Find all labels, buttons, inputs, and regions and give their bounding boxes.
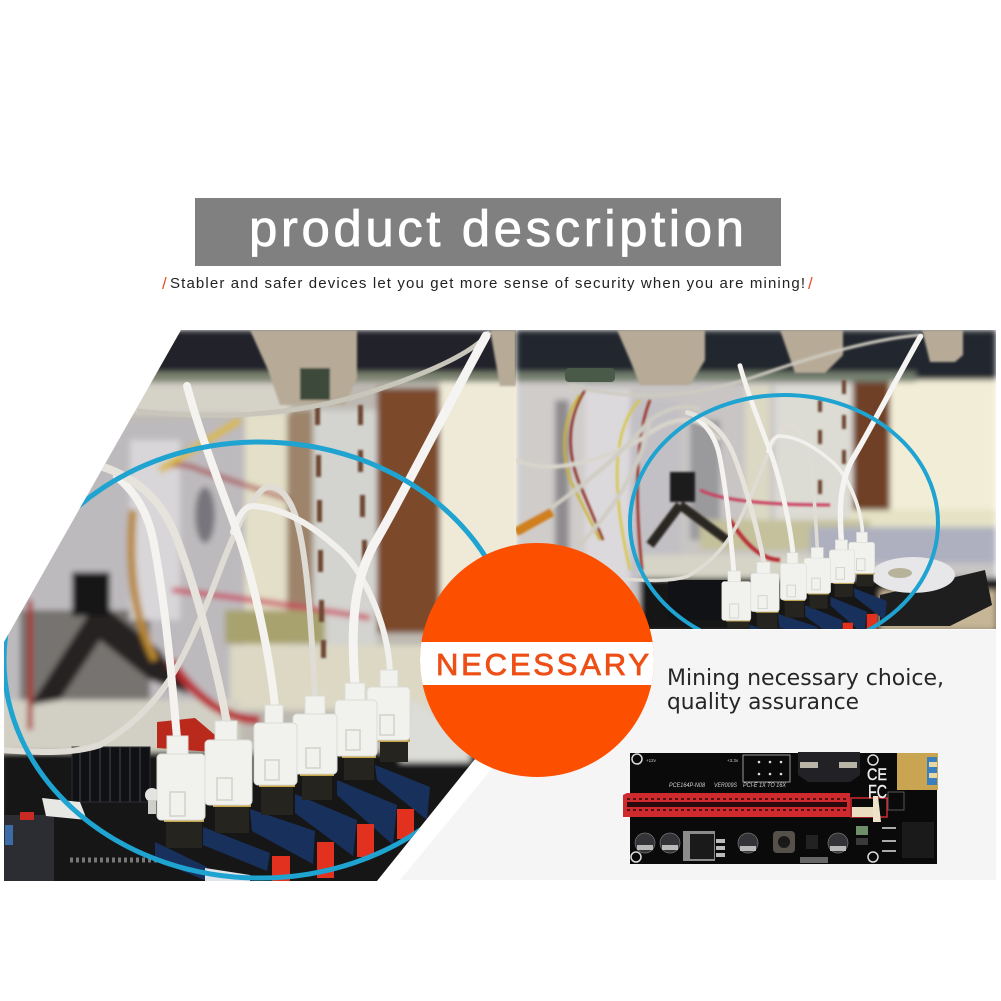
panel: left photo of riser cables xyxy=(0,330,520,892)
perforated metal slots xyxy=(315,405,367,658)
caption text: quality assurance xyxy=(667,690,859,715)
subtitle: Stabler and safer devices let you get more sense of security when you are mining! xyxy=(170,275,805,292)
product: PCIe riser board: CE xyxy=(867,765,887,784)
reused cables, plugs and boards xyxy=(627,336,921,661)
panel: right photo of riser cables xyxy=(516,330,996,629)
USB port xyxy=(897,753,938,790)
USB plugs xyxy=(157,670,410,820)
product: PCIe riser board: +12v xyxy=(646,758,657,763)
motherboard details xyxy=(4,718,215,881)
riser cables, plugs and boards xyxy=(0,336,486,890)
hard drive xyxy=(871,557,992,626)
metal brackets xyxy=(250,330,516,405)
wires xyxy=(516,335,920,570)
voltage regulator xyxy=(683,831,715,861)
capacitors xyxy=(635,833,848,853)
cables xyxy=(0,336,486,752)
small riser board xyxy=(565,368,615,382)
board labels: PCE164P-N08 xyxy=(669,782,705,789)
red slots xyxy=(272,809,414,882)
white board patch xyxy=(205,868,250,881)
subtitle: / xyxy=(808,274,813,293)
gold connector bands xyxy=(164,738,410,822)
red PCIe slot xyxy=(623,793,850,817)
blue highlight ellipse xyxy=(4,442,516,878)
mounting holes xyxy=(631,754,878,862)
product: PCIe riser board: +3.3v xyxy=(727,758,739,763)
photo background xyxy=(516,330,1000,633)
top grey cable xyxy=(137,332,490,415)
caption text: Mining necessary choice, xyxy=(667,666,944,691)
blue highlight ellipse xyxy=(630,395,938,651)
inductor xyxy=(773,831,795,853)
photo background xyxy=(0,330,520,892)
blue riser boards xyxy=(155,765,430,881)
product: PCIe riser board: VER009S xyxy=(714,783,737,789)
metal slots xyxy=(818,380,846,494)
panel: light caption background xyxy=(400,630,996,880)
power connector xyxy=(743,755,790,782)
product: PCIe riser board: PCI-E 1X TO 16X xyxy=(743,783,787,789)
brackets xyxy=(617,330,963,385)
chip and pins xyxy=(806,835,818,849)
caption text xyxy=(667,666,944,715)
heatsink xyxy=(668,580,728,585)
subtitle: / xyxy=(162,274,167,293)
product: PCIe riser board xyxy=(623,752,938,864)
pin header xyxy=(882,827,896,852)
badge: orange NECESSARY circle xyxy=(420,543,654,777)
connector shells xyxy=(166,738,408,848)
badge: orange NECESSARY circle: NECESSARY xyxy=(436,647,649,682)
product: PCIe riser board: FC xyxy=(868,782,887,802)
molex connector xyxy=(798,752,860,782)
title banner: product description xyxy=(249,200,744,257)
